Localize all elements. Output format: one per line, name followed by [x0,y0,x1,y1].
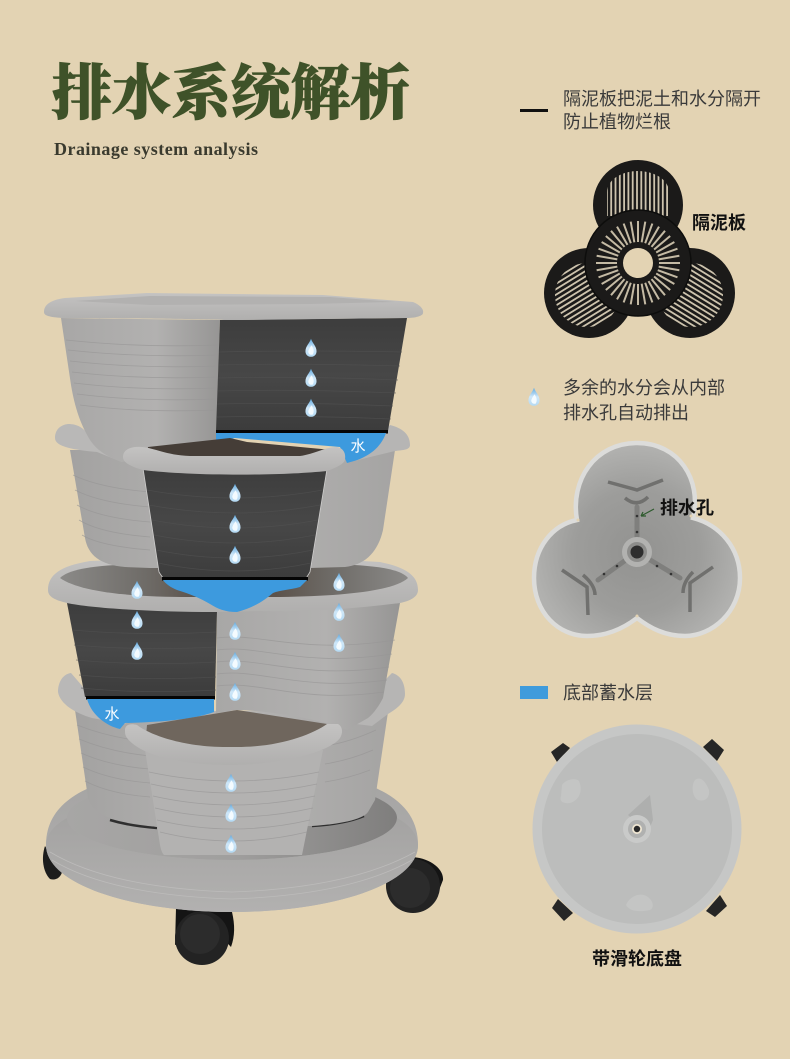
text: water layer legend: 底部蓄水层 [563,683,653,703]
tier 4 front pot [125,710,342,855]
inner wall [145,438,332,466]
legend: water layer swatch [520,686,548,699]
tier 2 front pot [123,438,345,612]
water layer [87,699,214,729]
tier 2 back pots [55,424,410,568]
dark cutaway section [216,318,407,431]
chevrons [562,480,713,615]
label: drainage hole: 排水孔 [660,498,714,518]
stacked planter cutaway: 水 [104,706,120,723]
legend: filter plate line [520,109,548,112]
light left section [61,318,220,462]
label: wheeled base tray: 带滑轮底盘 [592,948,682,969]
title: 排水系统解析 [52,61,410,127]
spokes [598,507,680,580]
rim [48,558,418,612]
photo: pot underside with drainage holes [534,443,740,636]
black divider [216,430,388,434]
tray front rim [46,818,418,912]
rim [123,447,345,475]
dark cutaway section [143,468,327,580]
black divider [86,696,215,700]
feet bumps [560,779,581,803]
water layer [216,433,386,463]
text: drainage description: 多余的水分会从内部 [563,378,725,398]
rim [44,293,423,320]
stacked planter cutaway [43,293,443,965]
light right section [216,603,400,730]
dark cutaway section [67,603,217,697]
centre hub [628,795,653,832]
text: filter plate description: 防止植物烂根 [563,112,671,132]
text: filter plate description: 隔泥板把泥土和水分隔开 [563,89,761,109]
black divider [162,577,308,580]
label: filter plate: 隔泥板 [692,213,746,233]
tier 1 pots [44,293,423,463]
subtitle: Drainage system analysis [54,139,258,159]
tier 3 pots [48,558,418,730]
water layer [163,580,307,612]
casters [551,739,727,921]
icon: water drop legend [528,388,540,406]
water labels: 水 [350,438,366,455]
water drops [131,339,345,853]
arrow: drainage hole pointer [641,509,654,516]
tier 4 back pots [58,673,405,827]
tray back [46,766,418,912]
photo: wheeled base tray [532,724,742,934]
icon: filter plate [544,160,735,338]
wheels [43,846,443,965]
text: drainage description: 排水孔自动排出 [563,403,689,423]
